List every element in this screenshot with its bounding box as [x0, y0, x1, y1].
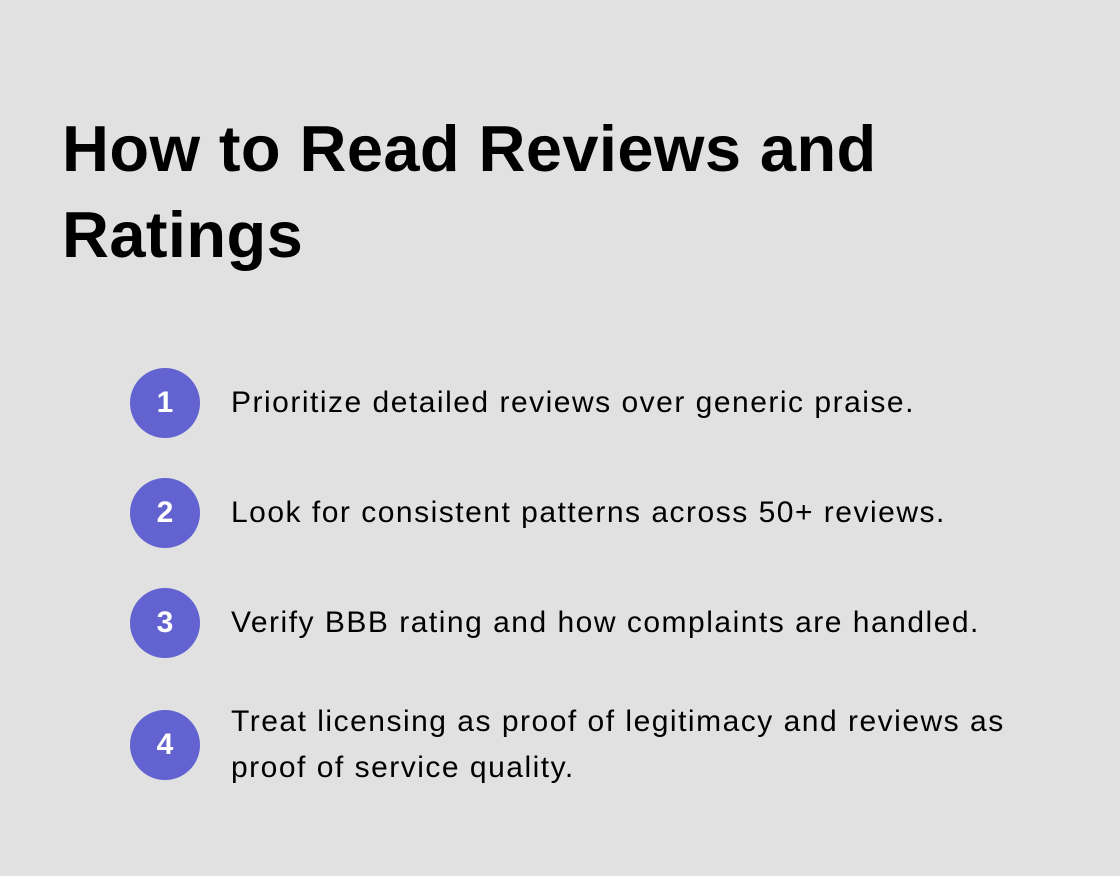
badge 3 [130, 588, 200, 658]
text 4: Treat licensing as proof of legitimacy and reviews as [231, 705, 1005, 738]
badge 4 [130, 710, 200, 780]
text 3: Verify BBB rating and how complaints are handled. [231, 606, 980, 639]
text 4: proof of service quality. [231, 751, 575, 784]
title: How to Read Reviews and [62, 112, 877, 185]
text 2: Look for consistent patterns across 50+ reviews. [231, 496, 946, 529]
item 1 [130, 368, 915, 438]
badge 1 [130, 368, 200, 438]
title [62, 112, 877, 271]
item 3 [130, 588, 980, 658]
badge 3: 3 [157, 606, 173, 639]
badge 4: 4 [157, 728, 173, 761]
item 2 [130, 478, 946, 548]
item 4 [130, 705, 1005, 784]
badge 2: 2 [157, 496, 173, 529]
title: Ratings [62, 198, 303, 271]
badge 1: 1 [157, 386, 173, 419]
text 1: Prioritize detailed reviews over generic praise. [231, 386, 915, 419]
text 4 [231, 705, 1005, 784]
badge 2 [130, 478, 200, 548]
